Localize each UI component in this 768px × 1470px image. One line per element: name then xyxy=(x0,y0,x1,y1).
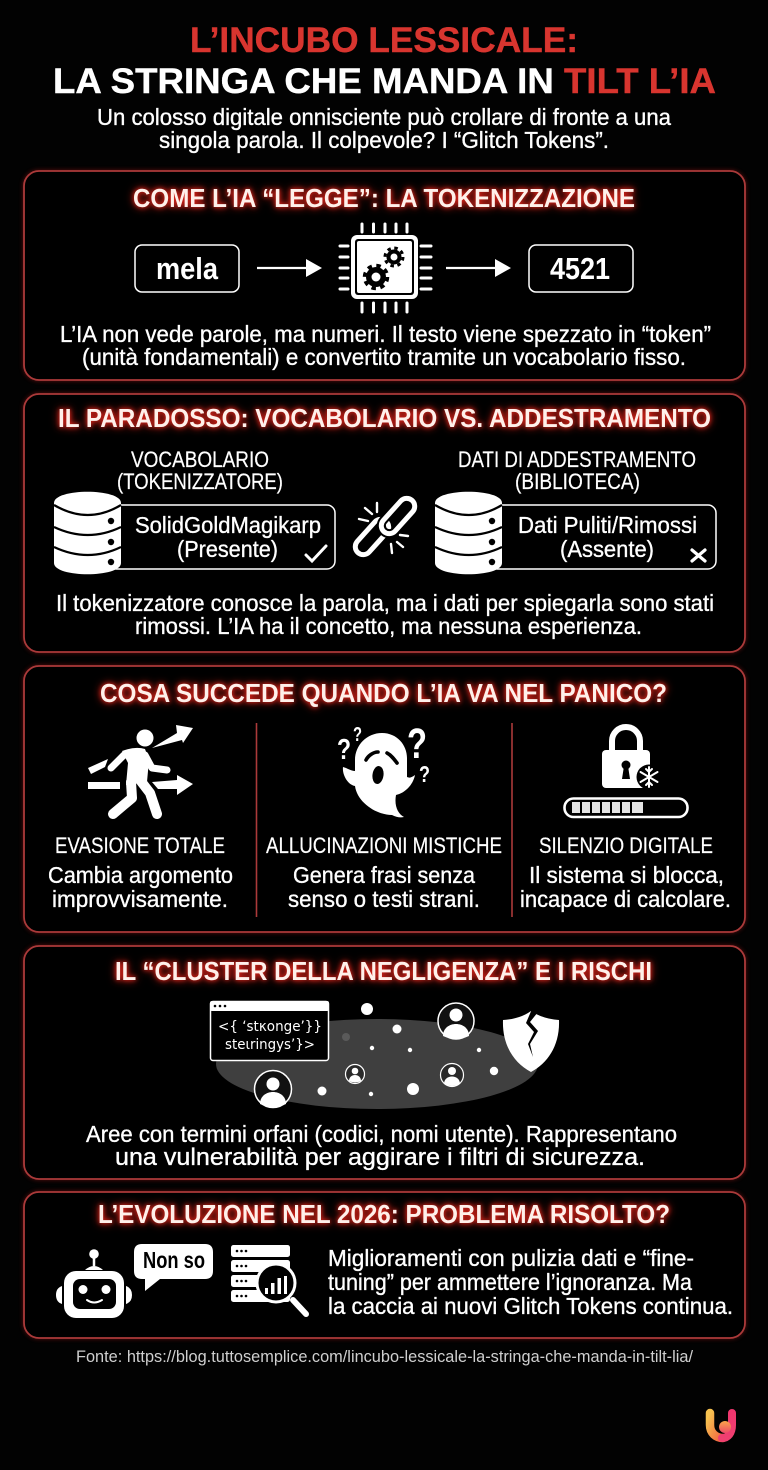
label: vocabolario xyxy=(117,447,283,494)
panel: paradosso xyxy=(24,394,745,652)
arrow: mela to chip xyxy=(257,259,322,277)
user icon top right xyxy=(438,1003,474,1039)
subtitle: singola parola. Il colpevole? I “Glitch Tokens”. xyxy=(159,127,609,153)
text: allucinazioni mistiche: ALLUCINAZIONI MISTICHE xyxy=(266,833,502,858)
text: allucinazioni mistiche: senso o testi strani. xyxy=(288,886,480,912)
speech bubble: non so: Non so xyxy=(143,1247,205,1273)
label: dati di addestramento: DATI DI ADDESTRAMENTO xyxy=(458,447,696,472)
text: silenzio digitale: Il sistema si blocca, xyxy=(529,862,724,888)
text: cluster: Aree con termini orfani (codici, nomi utente). Rappresentano xyxy=(86,1121,677,1147)
illustration: cluster xyxy=(210,1001,559,1109)
speech bubble: non so xyxy=(134,1244,213,1291)
icon: ghost with question marks: ? xyxy=(353,724,362,746)
text: tokenizzazione: L’IA non vede parole, ma numeri. Il testo viene spezzato in “token” xyxy=(60,321,711,347)
divider left xyxy=(256,723,258,917)
text: allucinazioni mistiche: Genera frasi senza xyxy=(293,862,476,888)
icon: broken shield xyxy=(503,1009,559,1072)
heading: panico: COSA SUCCEDE QUANDO L’IA VA NEL PANICO? xyxy=(100,678,667,708)
text: evoluzione xyxy=(328,1245,733,1319)
code window: <{ ‘stκonge’}} xyxy=(218,1019,322,1035)
arrow: chip to number xyxy=(446,259,511,277)
user icon bottom left xyxy=(254,1070,292,1108)
panel: cluster xyxy=(24,946,745,1179)
heading: paradosso: IL PARADOSSO: VOCABOLARIO VS. ADDESTRAMENTO xyxy=(58,403,711,433)
text: allucinazioni mistiche xyxy=(266,833,502,912)
code window xyxy=(210,1001,329,1060)
box: SolidGoldMagikarp xyxy=(108,505,335,569)
divider right xyxy=(511,723,513,917)
icon: running figure xyxy=(88,725,193,814)
icon: robot xyxy=(56,1249,132,1318)
text: silenzio digitale: incapace di calcolare. xyxy=(520,886,731,912)
box: SolidGoldMagikarp: SolidGoldMagikarp xyxy=(135,512,321,538)
text: evasione totale: improvvisamente. xyxy=(52,886,228,912)
icon: chip with gears xyxy=(340,224,431,312)
text: evoluzione: tuning” per ammettere l’ignoranza. Ma xyxy=(328,1269,693,1295)
heading: evoluzione: L’EVOLUZIONE NEL 2026: PROBLEMA RISOLTO? xyxy=(98,1199,670,1229)
panel: tokenizzazione xyxy=(24,171,745,380)
subtitle: Un colosso digitale onnisciente può crollare di fronte a una xyxy=(97,104,672,130)
user icon small right xyxy=(440,1064,464,1086)
label: dati di addestramento: (BIBLIOTECA) xyxy=(515,469,640,494)
box: dati puliti xyxy=(489,505,716,569)
input box: mela: mela xyxy=(156,251,219,286)
text: evoluzione: la caccia ai nuovi Glitch Tokens continua. xyxy=(328,1293,733,1319)
text: tokenizzazione xyxy=(60,321,711,370)
icon: database biblioteca xyxy=(435,492,502,574)
panel: evoluzione xyxy=(24,1192,745,1338)
icon: database vocabolario xyxy=(54,492,121,574)
text: evoluzione: Miglioramenti con pulizia dati e “fine- xyxy=(328,1245,694,1271)
box: dati puliti: Dati Puliti/Rimossi xyxy=(518,512,697,538)
icon: ghost with question marks: ? xyxy=(337,734,351,766)
text: silenzio digitale: SILENZIO DIGITALE xyxy=(539,833,713,858)
text: cluster: una vulnerabilità per aggirare i filtri di sicurezza. xyxy=(115,1144,645,1171)
icon: ghost with question marks: ? xyxy=(407,720,427,768)
text: paradosso xyxy=(56,590,714,639)
icon: ghost with question marks: ? xyxy=(419,761,430,787)
output box: 4521: 4521 xyxy=(550,251,610,286)
icon: frozen lock with progress bar xyxy=(564,727,688,817)
source line: Fonte: https://blog.tuttosemplice.com/lincubo-lessicale-la-stringa-che-manda-in-tilt-lia/ xyxy=(76,1347,693,1366)
title xyxy=(53,21,716,101)
text: cluster xyxy=(86,1121,677,1171)
logo xyxy=(710,1413,732,1438)
label: vocabolario: (TOKENIZZATORE) xyxy=(117,469,283,494)
box: SolidGoldMagikarp: (Presente) xyxy=(177,536,278,562)
box: dati puliti: (Assente) xyxy=(560,536,654,562)
text: silenzio digitale xyxy=(520,833,731,912)
text: evasione totale: EVASIONE TOTALE xyxy=(55,833,225,858)
text: evasione totale: Cambia argomento xyxy=(48,862,233,888)
heading: cluster: IL “CLUSTER DELLA NEGLIGENZA” E I RISCHI xyxy=(115,956,652,986)
text: evasione totale xyxy=(48,833,233,912)
text: paradosso: rimossi. L’IA ha il concetto, ma nessuna esperienza. xyxy=(135,613,642,639)
title: LA STRINGA CHE MANDA IN TILT L’IA xyxy=(53,62,716,101)
icon: broken chain link xyxy=(352,495,418,558)
title: L’INCUBO LESSICALE: xyxy=(190,21,578,60)
subtitle xyxy=(97,104,672,153)
label: vocabolario: VOCABOLARIO xyxy=(131,447,269,472)
label: dati di addestramento xyxy=(458,447,696,494)
user icon small center xyxy=(346,1064,364,1084)
icon: server with magnifier xyxy=(231,1245,306,1314)
panel: panico xyxy=(24,666,745,932)
icon: ghost with question marks xyxy=(337,720,430,817)
text: tokenizzazione: (unità fondamentali) e convertito tramite un vocabolario fisso. xyxy=(82,344,686,370)
input box: mela xyxy=(135,245,239,292)
output box: 4521 xyxy=(529,245,633,292)
text: paradosso: Il tokenizzatore conosce la parola, ma i dati per spiegarla sono stati xyxy=(56,590,714,616)
code window: steιringys’}> xyxy=(225,1037,315,1053)
heading: tokenizzazione: COME L’IA “LEGGE”: LA TOKENIZZAZIONE xyxy=(133,183,635,213)
